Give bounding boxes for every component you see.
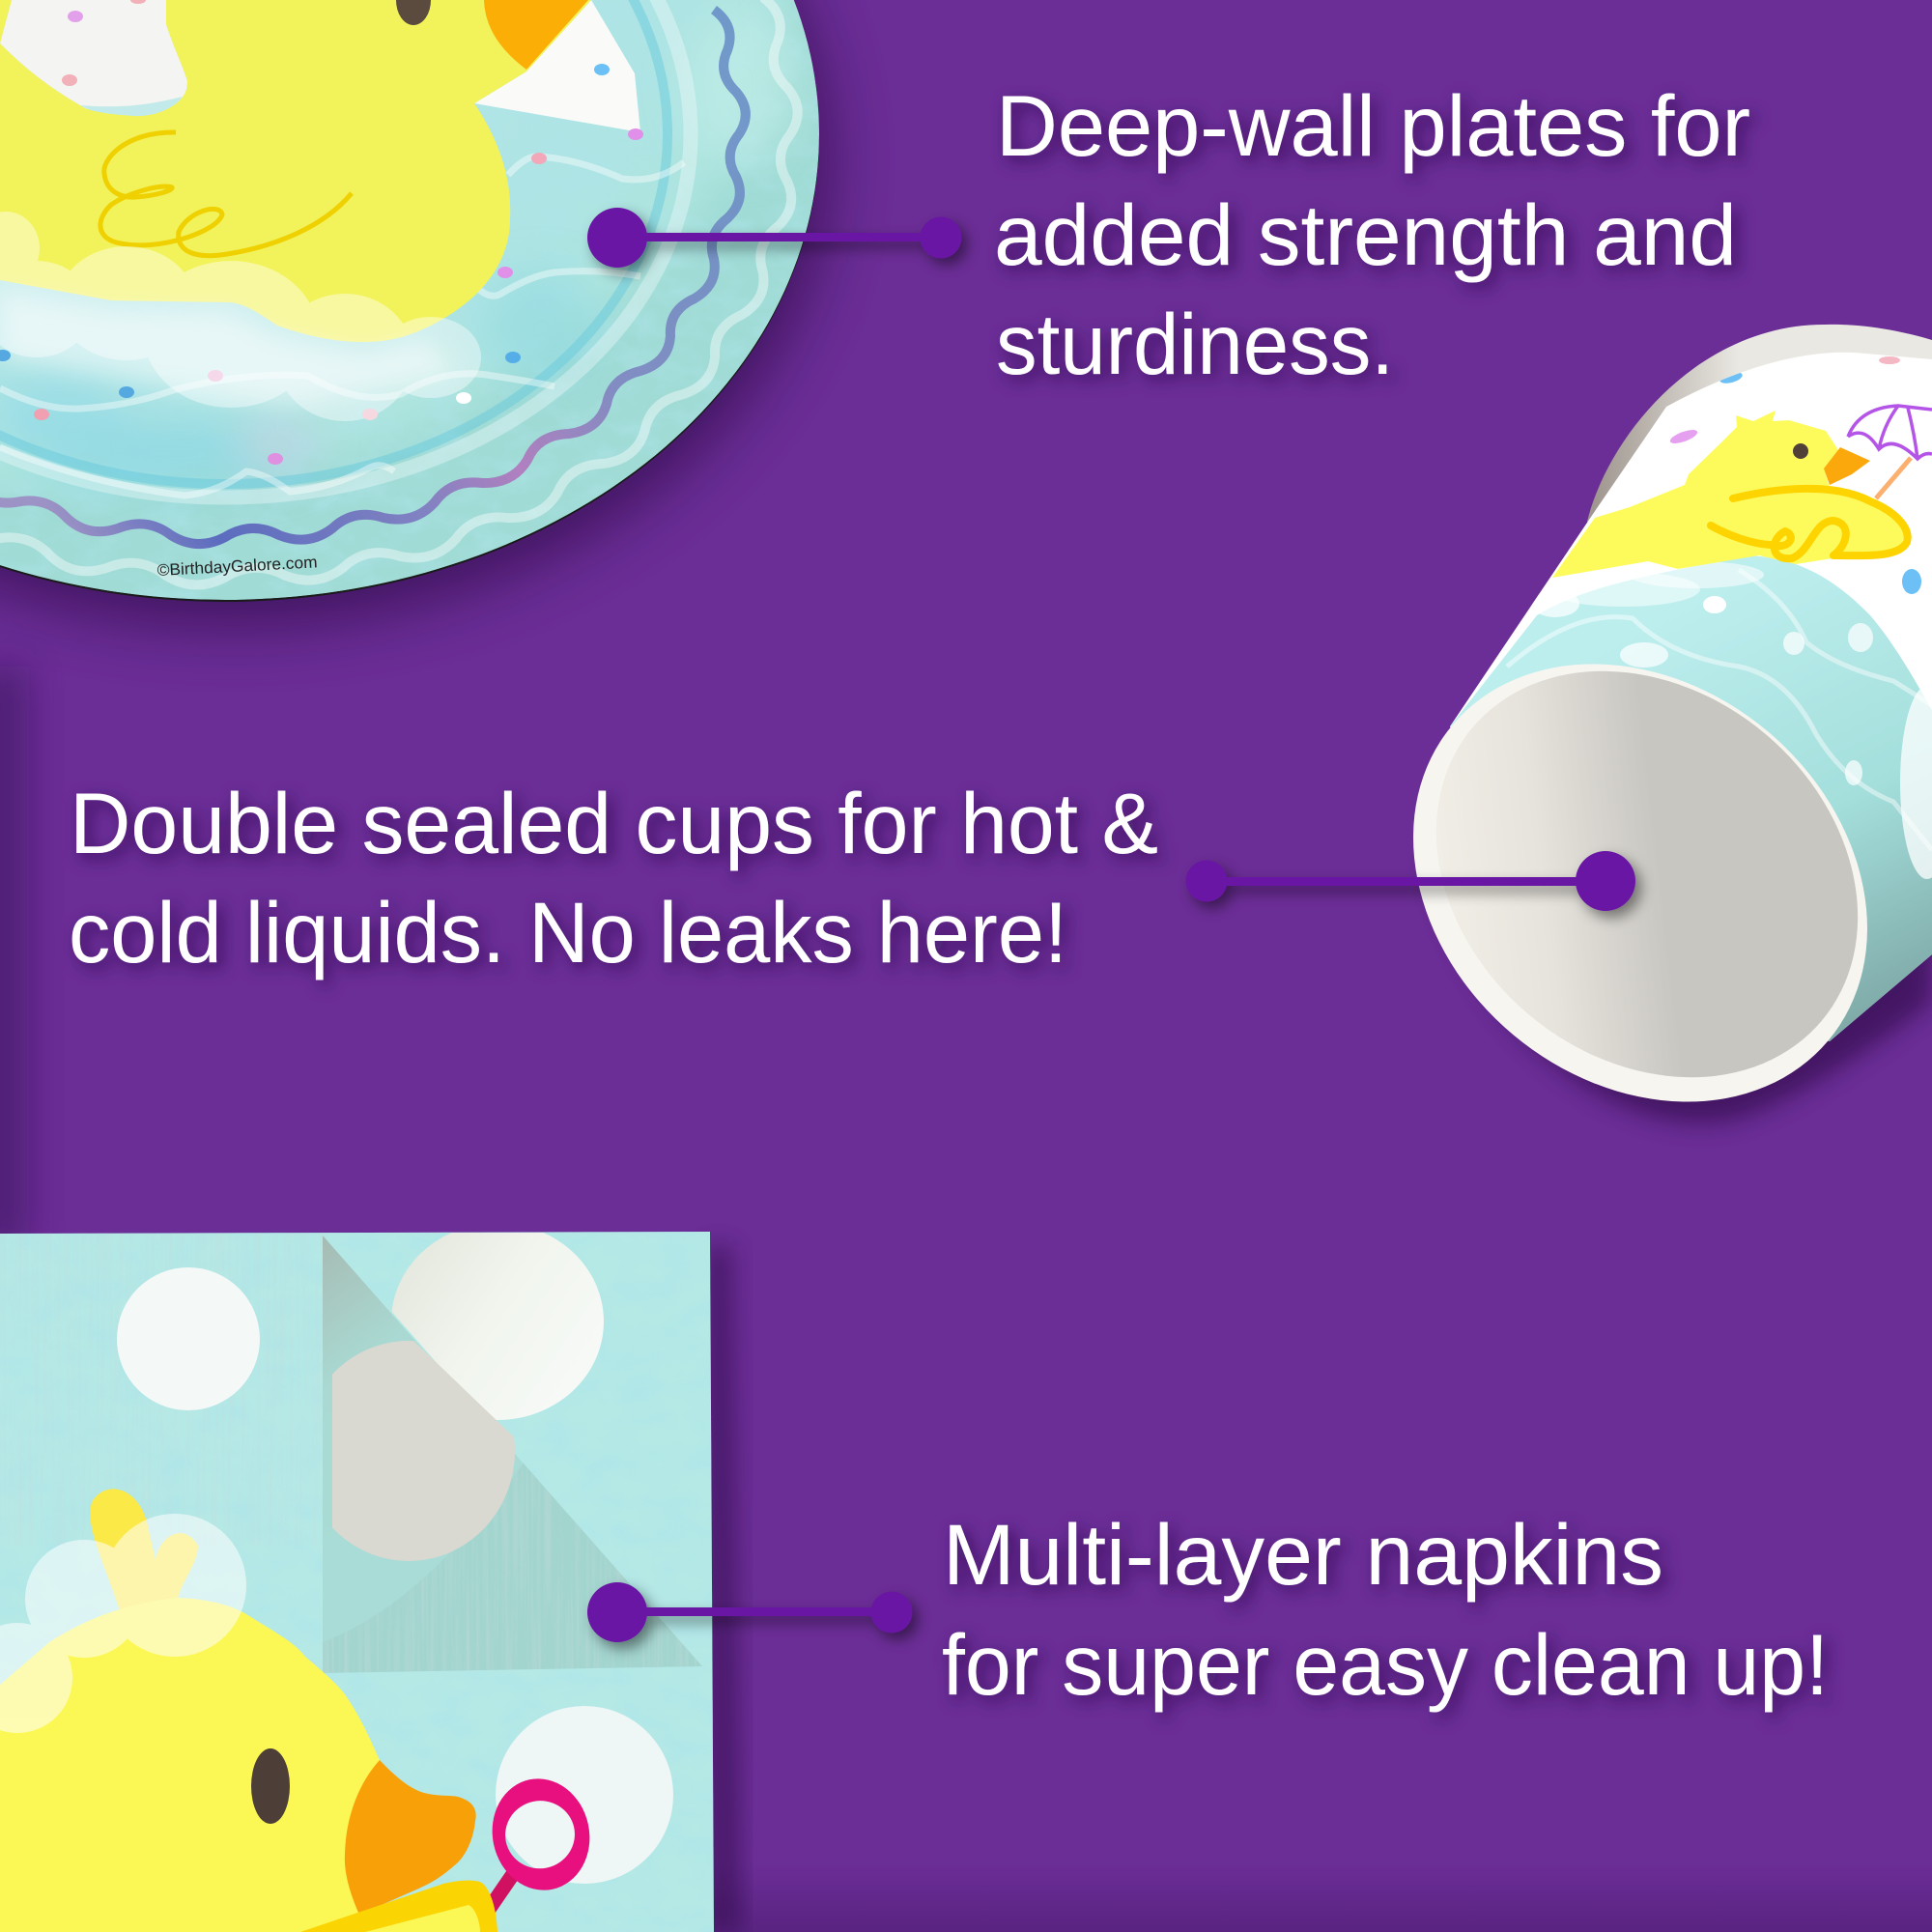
small duck scribble — [1711, 489, 1908, 558]
bubble top left — [117, 1267, 260, 1410]
water foam — [0, 292, 454, 406]
napkin caption: for super easy clean up! — [942, 1616, 1829, 1713]
cup wall — [1430, 328, 1932, 1063]
duck corner sliver — [0, 0, 12, 43]
duck collar — [300, 1881, 497, 1932]
duck beak — [345, 1760, 476, 1915]
watercolor blotches — [0, 10, 802, 487]
napkin callout connector — [587, 1582, 912, 1642]
small duck beak — [1824, 447, 1870, 485]
bubble under fold — [391, 1223, 604, 1420]
plate callout connector — [587, 208, 962, 268]
napkin ribbed texture — [0, 1227, 328, 1546]
cup base inside — [1354, 587, 1932, 1161]
umbrella — [1848, 406, 1932, 498]
paper cup — [1413, 325, 1932, 1134]
water wavy lines — [1507, 570, 1932, 850]
plate caption — [994, 77, 1750, 392]
napkin caption — [942, 1506, 1829, 1713]
foam bubbles — [1531, 561, 1932, 879]
bubbles — [0, 212, 481, 421]
cup caption: Double sealed cups for hot & — [70, 775, 1158, 871]
folded napkin — [0, 1223, 742, 1932]
plate caption: sturdiness. — [996, 296, 1394, 392]
plate caption: added strength and — [994, 186, 1737, 283]
cup callout connector — [1186, 851, 1635, 911]
paper mottling — [0, 0, 821, 604]
cup rim — [1325, 574, 1932, 1192]
duck body — [0, 0, 591, 342]
bottom edge vignette — [0, 1864, 1932, 1932]
left edge vignette — [0, 667, 29, 1246]
small duck — [1552, 411, 1907, 578]
duck eye — [396, 0, 431, 25]
duck beak — [484, 0, 588, 70]
bubble bottom right — [496, 1706, 673, 1884]
copyright text: ©BirthdayGalore.com — [156, 553, 318, 580]
duck bubbles — [0, 1514, 246, 1733]
inner rings — [0, 0, 668, 484]
napkin mottled texture — [0, 1227, 720, 1932]
thin water lines — [0, 156, 684, 496]
white background shapes — [0, 0, 187, 116]
cup confetti dots — [1719, 370, 1744, 385]
duck head — [0, 1598, 380, 1932]
grey bubble on flap — [302, 1341, 515, 1561]
duck tuft — [90, 1489, 198, 1613]
bubble wand handle — [488, 1864, 520, 1911]
plate caption: Deep-wall plates for — [996, 77, 1750, 174]
far rim — [1587, 325, 1932, 526]
collar inner — [365, 1905, 480, 1932]
white wavy line — [0, 0, 798, 584]
small duck eye — [1793, 443, 1808, 459]
napkin caption: Multi-layer napkins — [943, 1506, 1663, 1603]
duck wing curl — [100, 132, 352, 256]
folded flap — [319, 1232, 709, 1676]
bubble wand ring — [482, 1770, 600, 1899]
paper plate — [0, 0, 832, 629]
cup caption — [69, 775, 1158, 980]
duck eye — [251, 1748, 290, 1824]
cup caption: cold liquids. No leaks here! — [69, 884, 1067, 980]
aqua water band — [1450, 555, 1932, 1053]
confetti dots — [0, 0, 643, 465]
purple wavy line — [0, 10, 746, 544]
